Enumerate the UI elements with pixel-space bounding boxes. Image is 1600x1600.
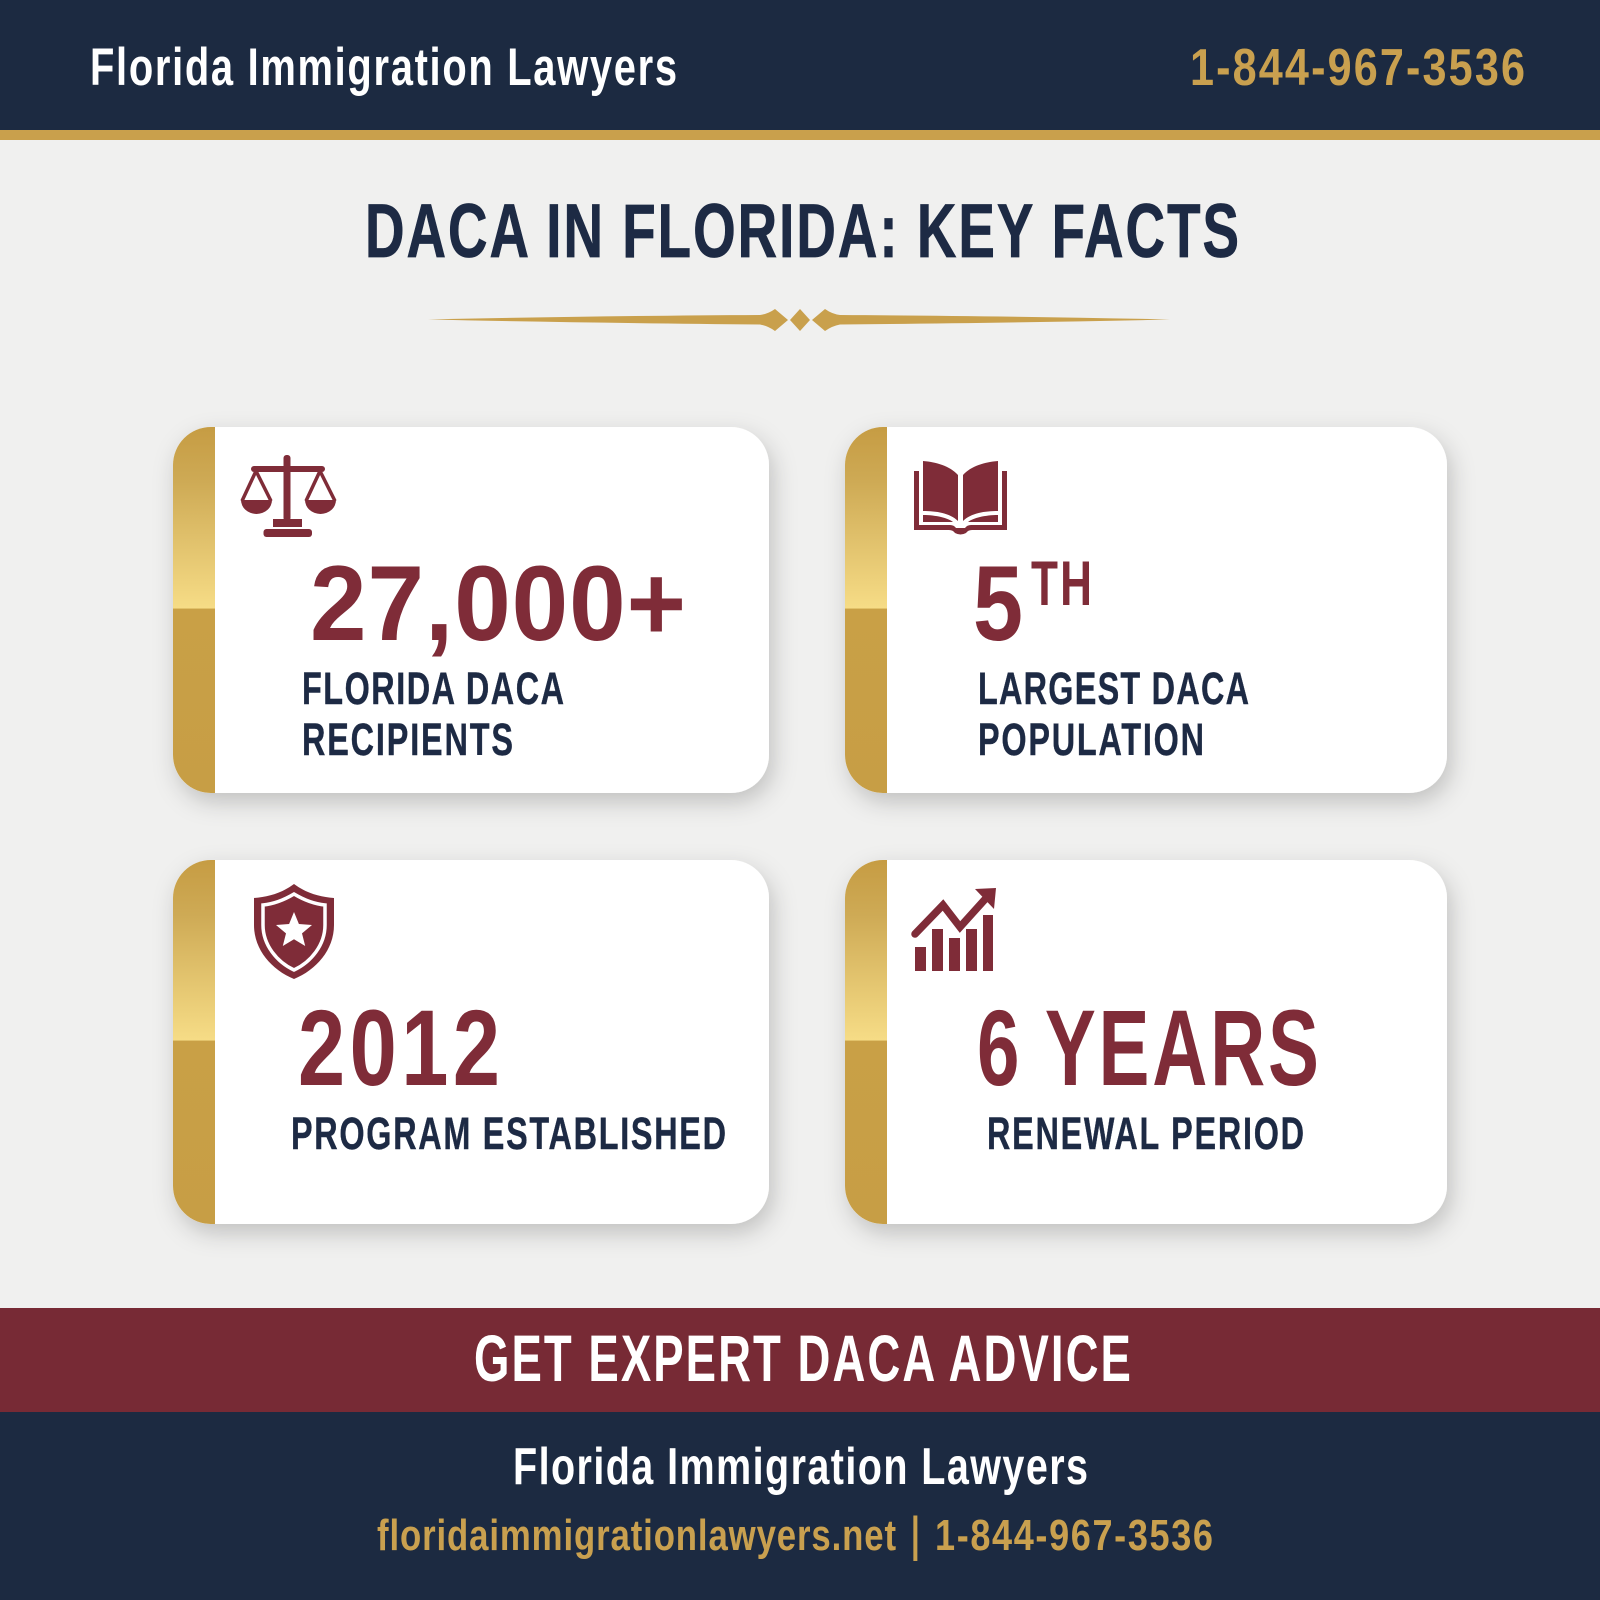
label: largest DACA population [978, 665, 1249, 765]
header bar [0, 0, 1600, 140]
label: Florida DACA recipients: RECIPIENTS [302, 716, 513, 765]
footer contact line: floridaimmigrationlawyers.net [377, 1511, 896, 1560]
title: DACA IN FLORIDA: KEY FACTS [365, 189, 1239, 274]
stat: 5th: 5 [973, 544, 1023, 663]
stat: 2012: 2012 [298, 987, 500, 1108]
icon: open book [914, 461, 1007, 534]
footer contact line: | [909, 1508, 922, 1562]
label: Florida DACA recipients [302, 665, 564, 765]
panel: largest DACA population [845, 427, 1447, 793]
stat: 5th [973, 544, 1092, 663]
icon: rising bar chart [915, 888, 996, 971]
label: renewal period: RENEWAL PERIOD [987, 1110, 1304, 1159]
icon: scales of justice [241, 455, 336, 537]
header bar: Florida Immigration Lawyers [90, 38, 677, 96]
panel: program established [173, 860, 769, 1224]
stat: 6 years: 6 YEARS [977, 987, 1319, 1108]
call to action banner: GET EXPERT DACA ADVICE [474, 1323, 1131, 1396]
call to action banner [0, 1308, 1600, 1412]
label: largest DACA population: LARGEST DACA [978, 665, 1249, 714]
label: largest DACA population: POPULATION [978, 716, 1204, 765]
footer contact line [377, 1508, 1213, 1562]
footer contact line: 1-844-967-3536 [935, 1511, 1213, 1560]
stat: 5th: TH [1031, 548, 1092, 619]
header bar: 1-844-967-3536 [1190, 39, 1525, 97]
title divider ornament [428, 309, 1170, 331]
stat: 27,000+: 27,000+ [310, 545, 686, 664]
panel: Florida DACA recipients [173, 427, 769, 793]
icon: shield with star [254, 884, 334, 979]
footer [0, 1412, 1600, 1600]
footer firm name: Florida Immigration Lawyers [513, 1437, 1088, 1495]
label: Florida DACA recipients: FLORIDA DACA [302, 665, 564, 714]
label: program established: PROGRAM ESTABLISHED [291, 1110, 726, 1159]
panel: renewal period [845, 860, 1447, 1224]
